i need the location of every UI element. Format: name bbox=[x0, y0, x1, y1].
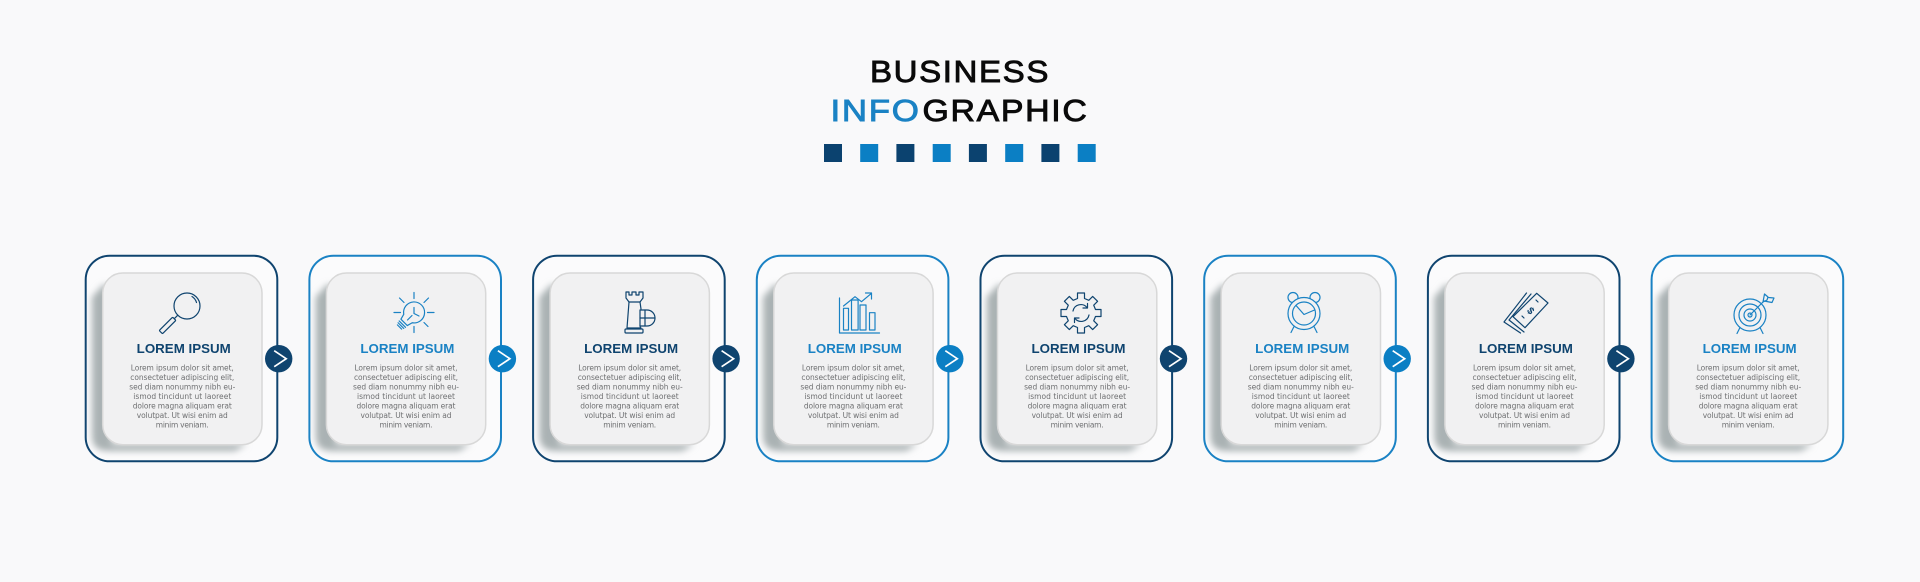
text block: step 1: Lorem ipsum dolor sit amet, bbox=[131, 364, 234, 372]
text block: step 4: consectetuer adipiscing elit, bbox=[801, 373, 905, 382]
heading: step 8: LOREM IPSUM bbox=[1703, 341, 1797, 356]
text block: step 5: minim veniam. bbox=[1051, 420, 1104, 430]
text block: step 4 bbox=[800, 364, 907, 430]
text block: step 6: minim veniam. bbox=[1274, 420, 1327, 430]
text block: step 3: dolore magna aliquam erat bbox=[580, 402, 679, 410]
text block: step 3: Lorem ipsum dolor sit amet, bbox=[578, 364, 681, 372]
text block: step 4: Lorem ipsum dolor sit amet, bbox=[802, 364, 905, 372]
text block: step 4: ismod tincidunt ut laoreet bbox=[804, 392, 902, 401]
text block: step 1: ismod tincidunt ut laoreet bbox=[133, 392, 231, 401]
text block: step 1: volutpat. Ut wisi enim ad bbox=[137, 411, 228, 420]
text block: step 6: ismod tincidunt ut laoreet bbox=[1252, 392, 1350, 401]
icon: alarm clock bbox=[1288, 292, 1320, 332]
text block: step 2: dolore magna aliquam erat bbox=[357, 402, 456, 410]
panel: step 2 bbox=[309, 256, 516, 461]
text block: step 8: consectetuer adipiscing elit, bbox=[1696, 373, 1800, 382]
text block: step 1: sed diam nonummy nibh eu- bbox=[129, 382, 236, 392]
icon: target with arrow bbox=[1734, 294, 1774, 334]
text block: step 2: Lorem ipsum dolor sit amet, bbox=[355, 364, 458, 372]
text block: step 4: dolore magna aliquam erat bbox=[804, 402, 903, 410]
panel: step 3 bbox=[533, 256, 740, 461]
icon: light bulb bbox=[392, 292, 434, 334]
text block: step 4: sed diam nonummy nibh eu- bbox=[800, 382, 907, 392]
text block: step 7: minim veniam. bbox=[1498, 420, 1551, 430]
text block: step 8: dolore magna aliquam erat bbox=[1699, 402, 1798, 410]
text block: step 5: Lorem ipsum dolor sit amet, bbox=[1026, 364, 1129, 372]
icon: bar chart with rising arrow bbox=[840, 293, 880, 333]
text block: step 2: minim veniam. bbox=[380, 420, 432, 430]
text block: step 2: volutpat. Ut wisi enim ad bbox=[361, 411, 452, 420]
heading: step 7: LOREM IPSUM bbox=[1479, 341, 1573, 356]
text block: step 6: sed diam nonummy nibh eu- bbox=[1248, 382, 1354, 392]
text block: step 7 bbox=[1472, 364, 1578, 430]
heading: step 2: LOREM IPSUM bbox=[360, 341, 454, 356]
text block: step 8: volutpat. Ut wisi enim ad bbox=[1703, 411, 1794, 420]
title: GRAPHIC bbox=[922, 93, 1088, 128]
title bbox=[830, 54, 1088, 128]
text block: step 7: Lorem ipsum dolor sit amet, bbox=[1473, 364, 1576, 372]
text block: step 4: minim veniam. bbox=[827, 420, 880, 430]
text block: step 3: consectetuer adipiscing elit, bbox=[578, 373, 682, 382]
text block: step 6: Lorem ipsum dolor sit amet, bbox=[1249, 364, 1352, 372]
text block: step 1 bbox=[129, 364, 236, 430]
text block: step 1: minim veniam. bbox=[156, 420, 209, 430]
arrow: step 5 bbox=[1160, 345, 1187, 372]
panel: step 8 bbox=[1652, 256, 1843, 461]
text block: step 7: ismod tincidunt ut laoreet bbox=[1475, 392, 1574, 401]
text block: step 2: sed diam nonummy nibh eu- bbox=[353, 382, 459, 392]
arrow: step 1 bbox=[265, 345, 292, 372]
text block: step 8 bbox=[1695, 364, 1801, 430]
text block: step 5: consectetuer adipiscing elit, bbox=[1025, 373, 1129, 382]
text block: step 2: ismod tincidunt ut laoreet bbox=[357, 392, 455, 401]
panel: step 1 bbox=[86, 256, 292, 461]
heading: step 4: LOREM IPSUM bbox=[808, 341, 902, 356]
text block: step 7: volutpat. Ut wisi enim ad bbox=[1479, 411, 1570, 420]
text block: step 5: ismod tincidunt ut laoreet bbox=[1028, 392, 1126, 401]
title: BUSINESS bbox=[870, 54, 1050, 89]
icon: stack of banknotes: $ bbox=[1524, 305, 1536, 318]
title: INFO bbox=[830, 93, 920, 128]
text block: step 2: consectetuer adipiscing elit, bbox=[354, 373, 458, 382]
text block: step 3: ismod tincidunt ut laoreet bbox=[581, 392, 679, 401]
text block: step 8: ismod tincidunt ut laoreet bbox=[1699, 392, 1797, 401]
text block: step 6: consectetuer adipiscing elit, bbox=[1249, 373, 1353, 382]
heading: step 6: LOREM IPSUM bbox=[1255, 341, 1349, 356]
text block: step 4: volutpat. Ut wisi enim ad bbox=[808, 411, 899, 420]
text block: step 2 bbox=[353, 364, 459, 430]
text block: step 6 bbox=[1248, 364, 1354, 430]
text block: step 8: minim veniam. bbox=[1722, 420, 1775, 430]
text block: step 3: volutpat. Ut wisi enim ad bbox=[584, 411, 675, 420]
panel: step 5 bbox=[980, 256, 1187, 461]
text block: step 8: Lorem ipsum dolor sit amet, bbox=[1697, 364, 1800, 372]
heading: step 1: LOREM IPSUM bbox=[137, 341, 231, 356]
icon: gear with cycle arrows bbox=[1061, 293, 1101, 333]
arrow: step 6 bbox=[1384, 345, 1411, 372]
text block: step 5 bbox=[1024, 364, 1130, 430]
icon: magnifying glass bbox=[159, 293, 200, 334]
text block: step 3 bbox=[577, 364, 683, 430]
text block: step 7: dolore magna aliquam erat bbox=[1475, 402, 1574, 410]
icon: chess rook and shield bbox=[625, 292, 655, 333]
text block: step 3: minim veniam. bbox=[603, 420, 656, 430]
arrow: step 3 bbox=[712, 345, 740, 372]
text block: step 6: volutpat. Ut wisi enim ad bbox=[1255, 411, 1347, 420]
panel: step 7 bbox=[1428, 256, 1635, 461]
text block: step 1: consectetuer adipiscing elit, bbox=[130, 373, 234, 382]
text block: step 1: dolore magna aliquam erat bbox=[133, 402, 232, 410]
text block: step 5: dolore magna aliquam erat bbox=[1028, 402, 1127, 410]
row of decorative squares bbox=[824, 144, 1096, 162]
text block: step 8: sed diam nonummy nibh eu- bbox=[1695, 382, 1801, 392]
arrow: step 2 bbox=[489, 345, 516, 372]
icon: stack of banknotes bbox=[1504, 293, 1548, 333]
panel: step 6 bbox=[1204, 256, 1411, 461]
text block: step 7: consectetuer adipiscing elit, bbox=[1472, 373, 1576, 382]
heading: step 3: LOREM IPSUM bbox=[584, 341, 678, 356]
text block: step 3: sed diam nonummy nibh eu- bbox=[577, 382, 683, 392]
text block: step 5: volutpat. Ut wisi enim ad bbox=[1032, 411, 1123, 420]
arrow: step 4 bbox=[936, 345, 964, 372]
text block: step 6: dolore magna aliquam erat bbox=[1251, 402, 1350, 410]
panel: step 4 bbox=[757, 256, 964, 461]
text block: step 5: sed diam nonummy nibh eu- bbox=[1024, 382, 1130, 392]
text block: step 7: sed diam nonummy nibh eu- bbox=[1471, 382, 1578, 392]
arrow: step 7 bbox=[1607, 345, 1635, 372]
heading: step 5: LOREM IPSUM bbox=[1031, 341, 1125, 356]
